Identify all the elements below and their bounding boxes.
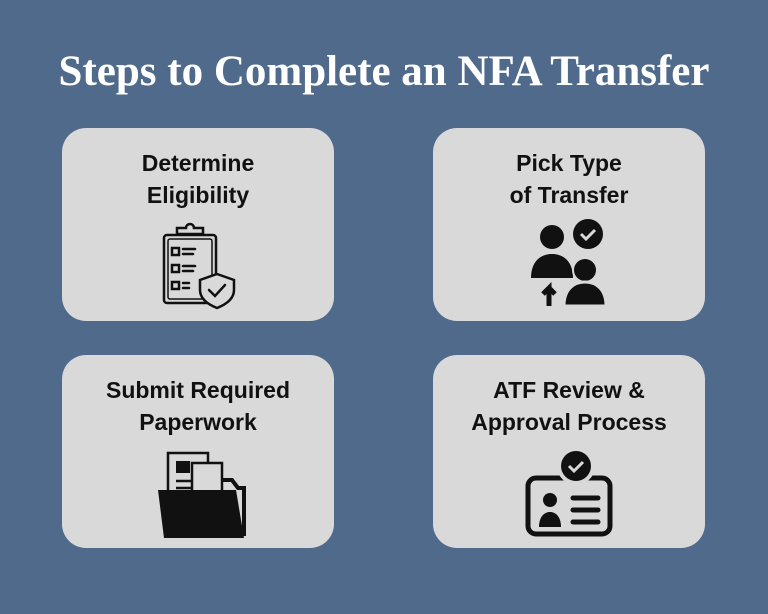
heading: determine eligibility: Eligibility <box>147 182 249 208</box>
panel: determine eligibility <box>62 128 334 321</box>
heading: atf review: Approval Process <box>471 409 667 435</box>
icon: people with check <box>531 219 604 306</box>
panel: submit required paperwork <box>62 355 334 548</box>
heading: submit required paperwork: Paperwork <box>139 409 257 435</box>
heading: submit required paperwork: Submit Required <box>106 377 290 403</box>
heading: atf review <box>471 377 667 435</box>
icon: folder with documents <box>158 452 246 538</box>
heading: atf review: ATF Review & <box>493 377 645 403</box>
panel: pick type of transfer <box>433 128 705 321</box>
heading: determine eligibility <box>142 150 254 208</box>
heading: pick type of transfer: Pick Type <box>516 150 622 176</box>
heading: pick type of transfer: of Transfer <box>510 182 628 208</box>
title: Steps to Complete an NFA Transfer <box>59 48 709 95</box>
heading: determine eligibility: Determine <box>142 150 254 176</box>
icon: id card with check <box>526 451 612 536</box>
icon: clipboard with shield <box>162 222 236 310</box>
heading: submit required paperwork <box>106 377 290 435</box>
panel: atf review <box>433 355 705 548</box>
heading: pick type of transfer <box>510 150 628 208</box>
